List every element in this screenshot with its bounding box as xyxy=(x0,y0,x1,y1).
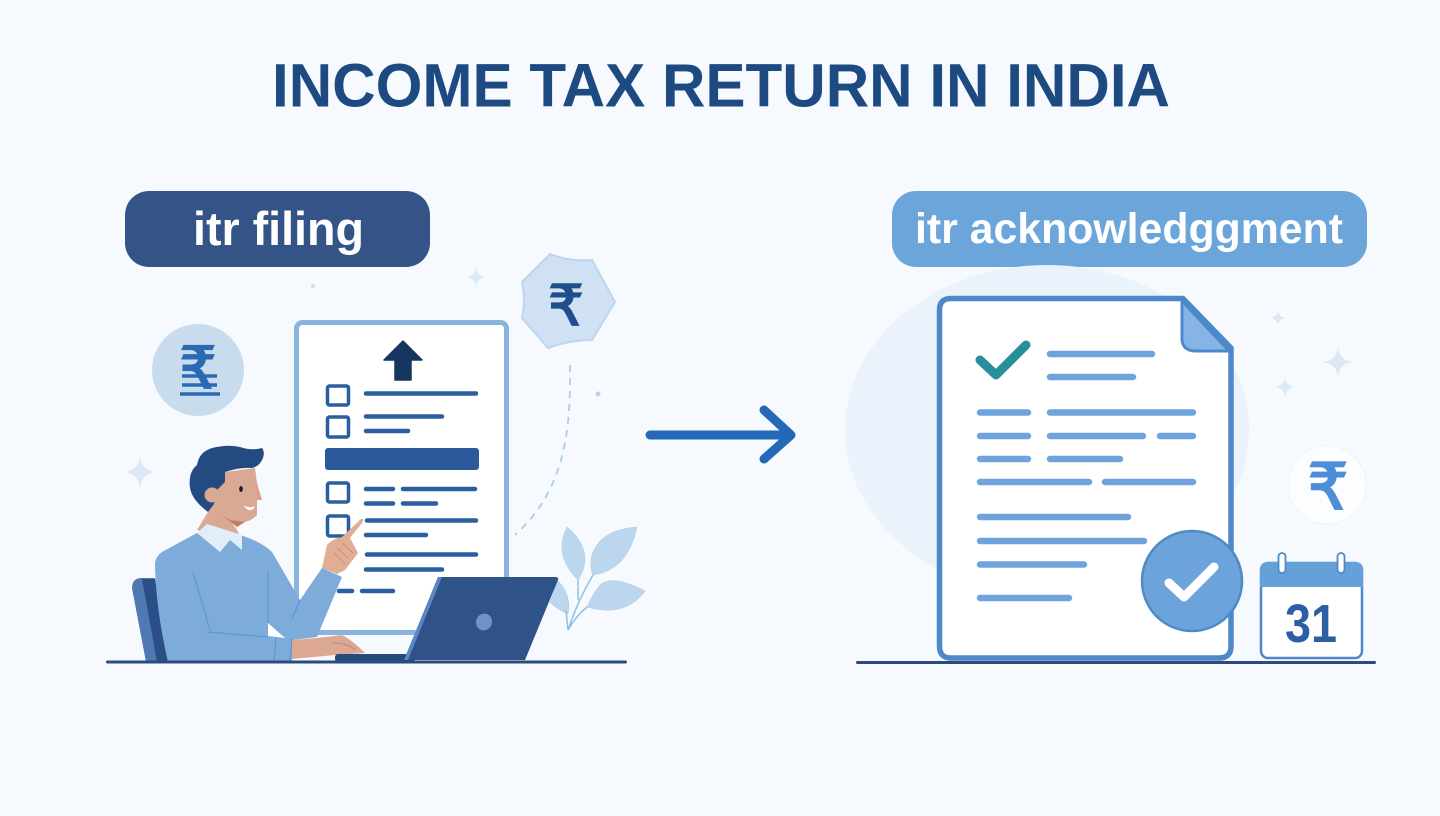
page fold xyxy=(1182,301,1229,351)
form section bar xyxy=(325,448,479,470)
pointing hand xyxy=(322,519,363,574)
hair xyxy=(190,446,264,512)
dashed connector curve xyxy=(515,365,570,535)
document text lines xyxy=(980,354,1193,598)
heading pill: itr filing: itr filing xyxy=(193,202,364,255)
laptop xyxy=(335,577,558,662)
icon: plant leaves xyxy=(550,527,645,630)
icon: upload arrow xyxy=(384,341,422,380)
heading pill: itr acknowledgment: itr acknowledggment xyxy=(915,205,1343,253)
sweater fold lines xyxy=(193,572,300,660)
chair xyxy=(132,578,168,662)
icon: rupee hexagon badge xyxy=(522,254,615,348)
panel: itr filing illustration xyxy=(106,254,645,664)
lower hand xyxy=(292,635,365,659)
person xyxy=(155,446,365,662)
teal check mark xyxy=(980,345,1026,375)
icon: rupee circle xyxy=(1288,446,1366,524)
acknowledgment document xyxy=(940,298,1231,658)
icon: rupee hexagon badge: ₹ xyxy=(548,274,584,337)
heading pill: itr acknowledgment xyxy=(892,191,1367,267)
sweater xyxy=(155,533,342,662)
background ellipse xyxy=(845,265,1249,595)
icon: rupee coin circle xyxy=(152,324,244,416)
form document xyxy=(296,322,506,632)
ground line left xyxy=(106,660,627,664)
collar xyxy=(197,524,242,552)
neck and face xyxy=(197,468,262,540)
decorative sparkles xyxy=(125,267,1354,488)
heading pill: itr filing xyxy=(125,191,430,267)
icon: rupee coin circle: ₹ xyxy=(180,336,216,401)
form text lines xyxy=(339,394,476,591)
ear xyxy=(204,488,220,502)
icon: rupee circle: ₹ xyxy=(1308,451,1348,523)
arrow xyxy=(650,410,791,459)
form checkboxes xyxy=(328,386,348,536)
icon: approval badge xyxy=(1142,531,1242,631)
icon: calendar: 31 xyxy=(1285,594,1337,654)
title: INCOME TAX RETURN IN INDIA xyxy=(272,52,1170,120)
icon: calendar xyxy=(1260,553,1363,658)
ground line right xyxy=(856,661,1376,664)
gap between torso and arm xyxy=(268,623,285,638)
panel: itr acknowledgment illustration xyxy=(845,265,1376,664)
